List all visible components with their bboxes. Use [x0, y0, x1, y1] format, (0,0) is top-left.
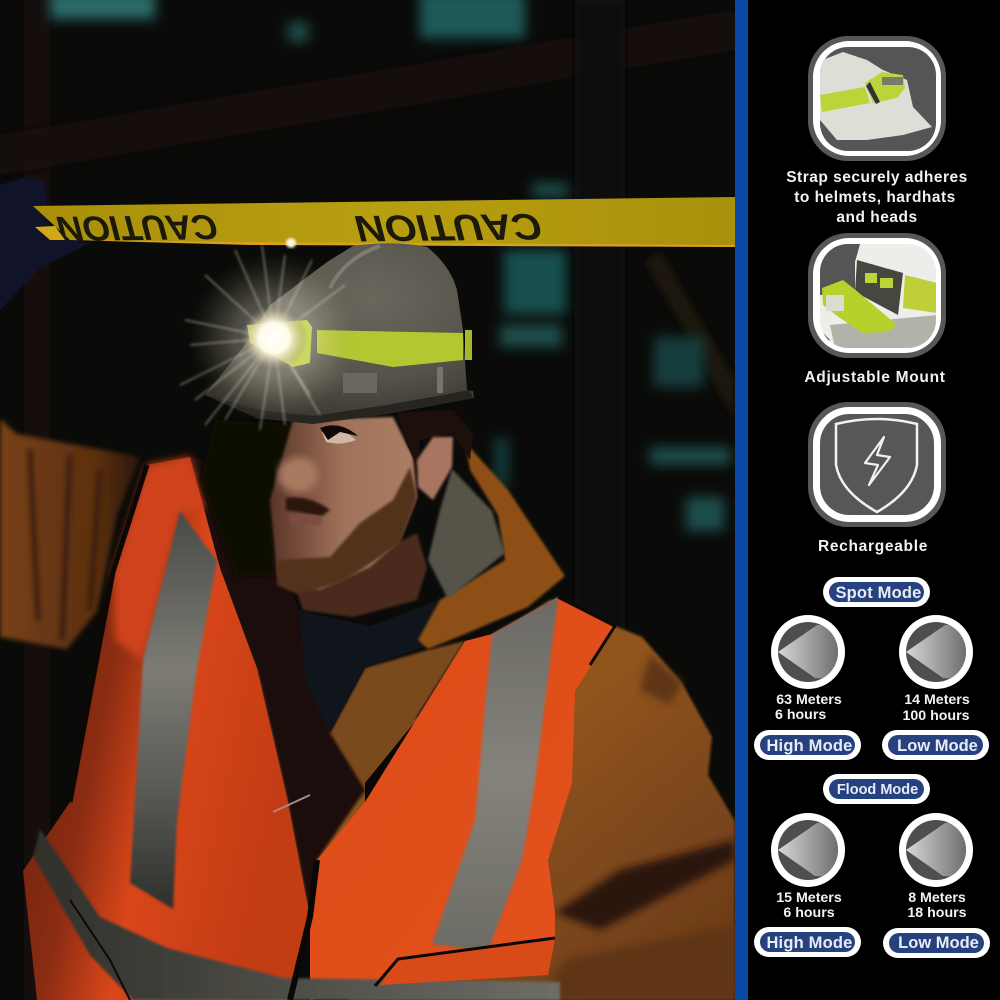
badge: spot high mode: High Mode	[766, 737, 853, 755]
badge: spot mode	[823, 577, 930, 607]
text: flood low stats: 18 hours	[907, 905, 967, 921]
badge: spot low mode: Low Mode	[897, 737, 978, 755]
text: flood low stats: 8 Meters	[908, 890, 966, 906]
icon: flood high beam	[771, 813, 845, 887]
badge: flood high mode	[754, 927, 861, 957]
safety vest	[23, 457, 615, 1000]
text: flood high stats	[776, 890, 842, 921]
left vest panel	[23, 457, 310, 1000]
text: spot low stats: 14 Meters	[904, 692, 970, 708]
text: rechargeable: Rechargeable	[818, 538, 928, 555]
text: spot high stats: 63 Meters	[776, 692, 842, 708]
text: strap description: Strap securely adheres	[786, 169, 968, 186]
glove	[0, 176, 90, 310]
icon: rechargeable shield	[808, 402, 946, 527]
headlamp strap	[317, 330, 463, 367]
icon: flood low beam	[899, 813, 973, 887]
icon: strap on helmet	[808, 36, 946, 161]
badge: spot high mode	[754, 730, 861, 760]
photo background	[0, 0, 735, 1000]
icon: spot low beam	[899, 615, 973, 689]
hard hat with headlamp strap	[205, 243, 474, 424]
right reflective strip	[432, 597, 558, 951]
face and neck	[200, 410, 473, 617]
text: adjustable mount: Adjustable Mount	[804, 369, 946, 386]
caution tape: CAUTION	[350, 206, 547, 250]
text: strap description: and heads	[836, 209, 918, 226]
hair	[397, 410, 473, 467]
badge: flood low mode: Low Mode	[898, 934, 979, 952]
front jacket panel	[330, 641, 465, 800]
jacket	[0, 419, 735, 1000]
nose	[278, 457, 318, 493]
badge: flood mode	[823, 774, 930, 804]
text: spot high stats	[775, 692, 842, 723]
panel: worker photo	[0, 0, 735, 1000]
right vest panel	[310, 597, 615, 1000]
left reflective strip	[130, 511, 217, 909]
fleece collar	[428, 469, 505, 599]
text: flood high stats: 6 hours	[783, 905, 835, 921]
badge: flood low mode	[883, 928, 990, 958]
text: flood high stats: 15 Meters	[776, 890, 842, 906]
badge: spot low mode	[882, 730, 989, 760]
t-shirt	[300, 600, 445, 733]
badge: spot mode: Spot Mode	[835, 584, 922, 602]
text: spot high stats: 6 hours	[775, 707, 826, 723]
light flare	[180, 238, 359, 430]
lower reflective strip	[33, 829, 560, 1000]
text: strap description: to helmets, hardhats	[794, 189, 956, 206]
icon: spot high beam	[771, 615, 845, 689]
icon: adjustable mount	[808, 233, 946, 358]
text: spot low stats: 100 hours	[902, 708, 970, 724]
text: flood low stats	[907, 890, 967, 921]
badge: flood high mode: High Mode	[766, 934, 853, 952]
caution tape	[33, 197, 735, 250]
blue divider bar	[735, 0, 748, 1000]
hood	[418, 442, 565, 649]
bright top of left vest	[113, 457, 205, 660]
badge: flood mode: Flood Mode	[837, 782, 918, 798]
ear	[417, 437, 453, 500]
text: strap description	[786, 169, 968, 226]
caution tape: CAUTION	[52, 207, 222, 248]
text: spot low stats	[902, 692, 970, 724]
